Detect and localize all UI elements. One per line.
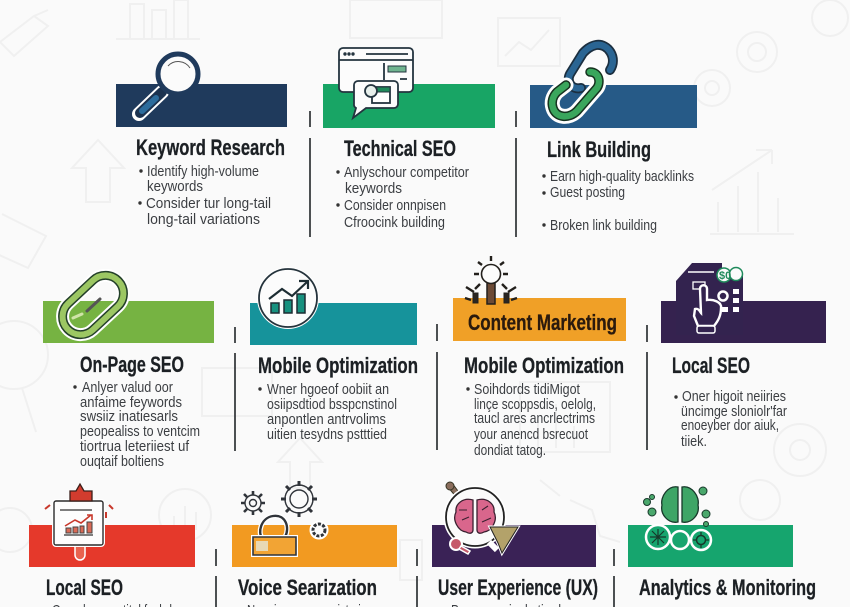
panel: On-Page SEO	[43, 268, 214, 470]
bar: red	[29, 525, 195, 567]
bullet list: Anlyschour competitor	[344, 164, 469, 181]
panel: Local SEO (red)	[29, 484, 195, 607]
heading: Link Building	[547, 137, 651, 162]
bar: amber	[453, 298, 626, 341]
panel: Content Marketing	[453, 256, 626, 459]
bullet list: keywords	[147, 178, 203, 195]
heading: Technical SEO	[344, 136, 456, 161]
bullet list: anfaime feywords	[80, 394, 182, 411]
bullet list: Consider onnpisen	[344, 197, 446, 214]
panel: Keyword Research	[116, 54, 287, 228]
bar: teal	[250, 303, 417, 345]
icon: brain in magnifier with funnel	[445, 482, 518, 554]
panel: Analytics & Monitoring	[628, 487, 816, 600]
bullet list: Oner higoit neiiries	[682, 388, 786, 405]
icon: growth chart in circle	[257, 267, 319, 329]
bar: lime green	[43, 301, 214, 343]
bar: green	[628, 525, 793, 567]
bullet list: linçe scoppsdis, oelolg,	[474, 396, 596, 413]
bullet list: ouqtaif boltiens	[80, 453, 164, 470]
bar label: Content Marketing	[468, 310, 617, 335]
divider	[309, 111, 311, 237]
bullet list: uitien tesydns pstttied	[267, 426, 387, 443]
bullet list: keywords	[345, 180, 402, 197]
bullet list	[73, 379, 200, 470]
bullet list: Cfroocink building	[344, 214, 445, 231]
divider	[215, 549, 217, 607]
bullet list: tiiek.	[681, 433, 707, 450]
bullet list: anpontlen antrvolims	[267, 411, 386, 428]
divider	[613, 549, 615, 607]
panel: Link Building	[530, 45, 697, 234]
divider	[436, 324, 438, 450]
heading: On-Page SEO	[80, 352, 184, 377]
icon: clipboard with chart	[45, 484, 113, 560]
bullet list: swsiiz inatiesarls	[80, 408, 178, 425]
bar: orange	[232, 525, 397, 567]
divider	[234, 327, 236, 451]
icon: control panel with hand	[676, 263, 743, 335]
bullet list	[138, 163, 271, 228]
bullet list: Guest posting	[550, 184, 625, 201]
icon: chain link	[55, 268, 131, 342]
panel: Voice Searization	[232, 481, 397, 607]
bullet list: Anlyer valud oor	[82, 379, 173, 396]
icon: green brain and cells	[644, 487, 711, 550]
bullet list	[466, 381, 596, 459]
icon: chain links	[552, 45, 613, 116]
bullet list	[674, 388, 787, 450]
bullet list: dondiat tatog.	[474, 442, 546, 459]
bullet list: Soihdords tidiMigot	[474, 381, 581, 398]
bullet list: taucl ares ancrlectrims	[474, 410, 595, 427]
bar: navy	[116, 84, 287, 127]
icon: magnifying glass	[139, 54, 198, 114]
bullet list: tiortrua leteriiest uf	[80, 438, 190, 455]
icon: control panel with hand: $0	[719, 270, 731, 282]
icon: person and gears	[241, 481, 327, 555]
bar: purple	[432, 525, 596, 567]
panel: Local SEO	[661, 263, 826, 450]
heading: Mobile Optimization	[258, 353, 418, 378]
bullet list: üncimge sloniolr'far	[681, 403, 787, 420]
bullet list: your anencd bsrecuot	[474, 426, 589, 443]
heading: Local SEO	[672, 353, 750, 378]
panel: Technical SEO	[323, 48, 495, 231]
heading: User Experience (UX)	[438, 575, 598, 600]
bar: green	[323, 84, 495, 128]
bullet list: osiipsdtiod bsspcnstinol	[267, 396, 397, 413]
bullet list	[258, 381, 397, 443]
bar: blue	[530, 85, 697, 128]
bullet list: Consider tur long-tail	[146, 195, 271, 212]
divider	[416, 549, 418, 607]
divider	[515, 111, 517, 237]
bullet list: Earn high-quality backlinks	[550, 168, 694, 185]
bullet list	[542, 168, 694, 234]
panel: User Experience (UX)	[432, 482, 598, 607]
bar: dark purple	[661, 301, 826, 343]
heading: Voice Searization	[238, 575, 377, 600]
bullet list: enoeyber dor aiuk,	[681, 417, 779, 434]
bullet list: peopealiss to ventcim	[80, 423, 200, 440]
divider	[646, 325, 648, 450]
bullet list: Wner hgoeof oobiit an	[267, 381, 389, 398]
icon: light bulb with rays	[465, 256, 517, 304]
bullet list	[336, 164, 469, 231]
bullet list: Broken link building	[550, 217, 657, 234]
heading: Keyword Research	[136, 135, 285, 160]
bullet list: Identify high-volume	[147, 163, 259, 180]
heading: Local SEO	[46, 575, 123, 600]
bullet list: long-tail variations	[147, 211, 260, 228]
icon: browser and chat bubble	[339, 48, 413, 118]
panel: Mobile Optimization	[250, 267, 418, 443]
heading: Mobile Optimization	[464, 353, 624, 378]
